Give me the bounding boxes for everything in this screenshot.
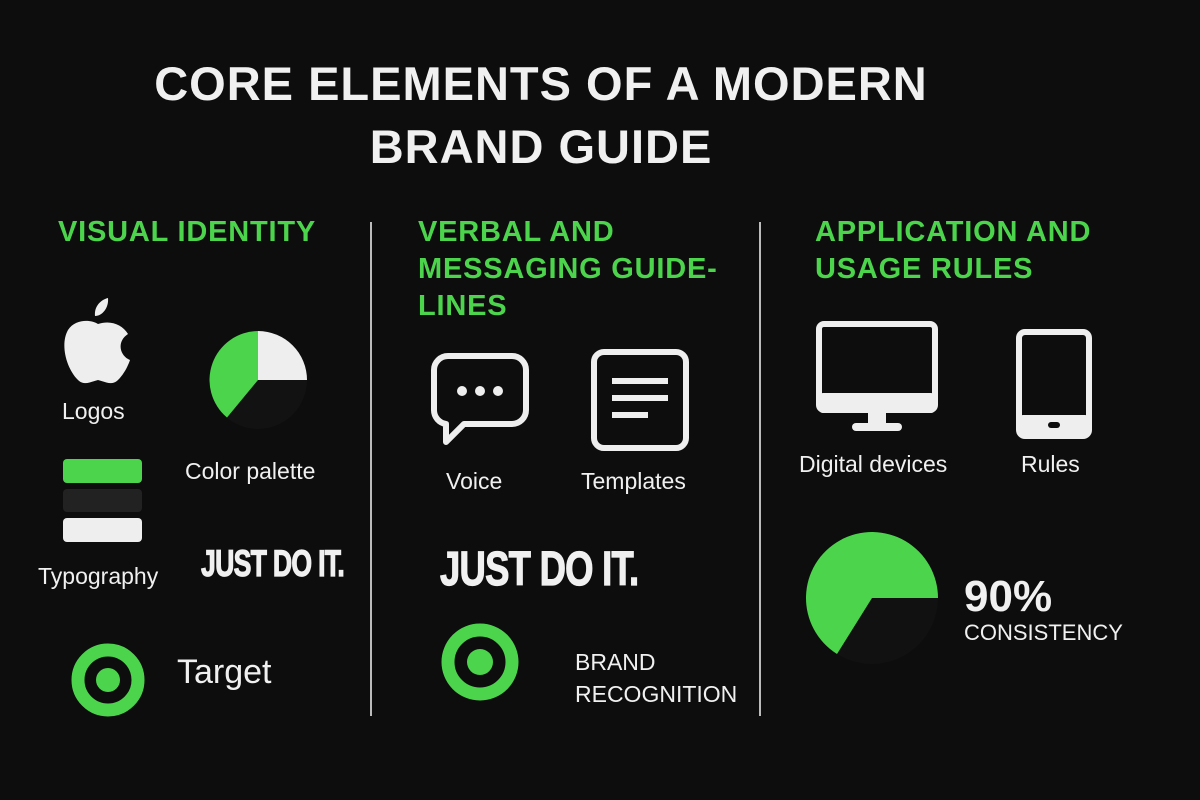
icon: target [72, 644, 144, 716]
label: color palette: Color palette [185, 458, 315, 484]
panel: application and usage [799, 216, 1123, 654]
label: brand recognition: BRAND [575, 649, 656, 675]
label: consistency: CONSISTENCY [964, 620, 1123, 645]
heading: application: USAGE RULES [815, 253, 1033, 285]
heading: visual identity: VISUAL IDENTITY [58, 216, 316, 248]
icon: brand target [442, 624, 518, 700]
panel: visual identity [38, 216, 344, 716]
slogan: JUST DO IT. [440, 543, 638, 596]
icon: templates [591, 349, 689, 451]
icon: apple logo [64, 298, 130, 384]
heading: verbal: VERBAL AND [418, 216, 615, 248]
chart: color palette pie [210, 331, 307, 418]
slogan: JUST DO IT. [201, 543, 344, 584]
icon: typography bars [63, 459, 142, 542]
heading: verbal [418, 216, 718, 322]
panel: verbal and messaging [418, 216, 737, 707]
label: brand recognition [575, 649, 737, 707]
icon: monitor [816, 321, 938, 431]
icon: tablet [1016, 329, 1092, 439]
label: voice: Voice [446, 468, 502, 494]
heading: verbal: MESSAGING GUIDE- [418, 253, 718, 285]
label: target: Target [177, 653, 272, 691]
icon: speech bubble [431, 353, 529, 445]
chart: consistency pie [806, 532, 938, 654]
title: BRAND GUIDE [370, 120, 712, 173]
label: digital devices: Digital devices [799, 451, 947, 477]
label: brand recognition: RECOGNITION [575, 681, 737, 707]
title: CORE ELEMENTS OF A MODERN [154, 57, 928, 110]
label: templates: Templates [581, 468, 686, 494]
label: typography: Typography [38, 563, 158, 589]
heading: application: APPLICATION AND [815, 216, 1091, 248]
label: rules: Rules [1021, 451, 1080, 477]
heading: application [815, 216, 1091, 285]
label: logos: Logos [62, 398, 125, 424]
heading: verbal: LINES [418, 290, 507, 322]
title [154, 57, 928, 173]
stat: 90%: 90% [964, 572, 1052, 621]
